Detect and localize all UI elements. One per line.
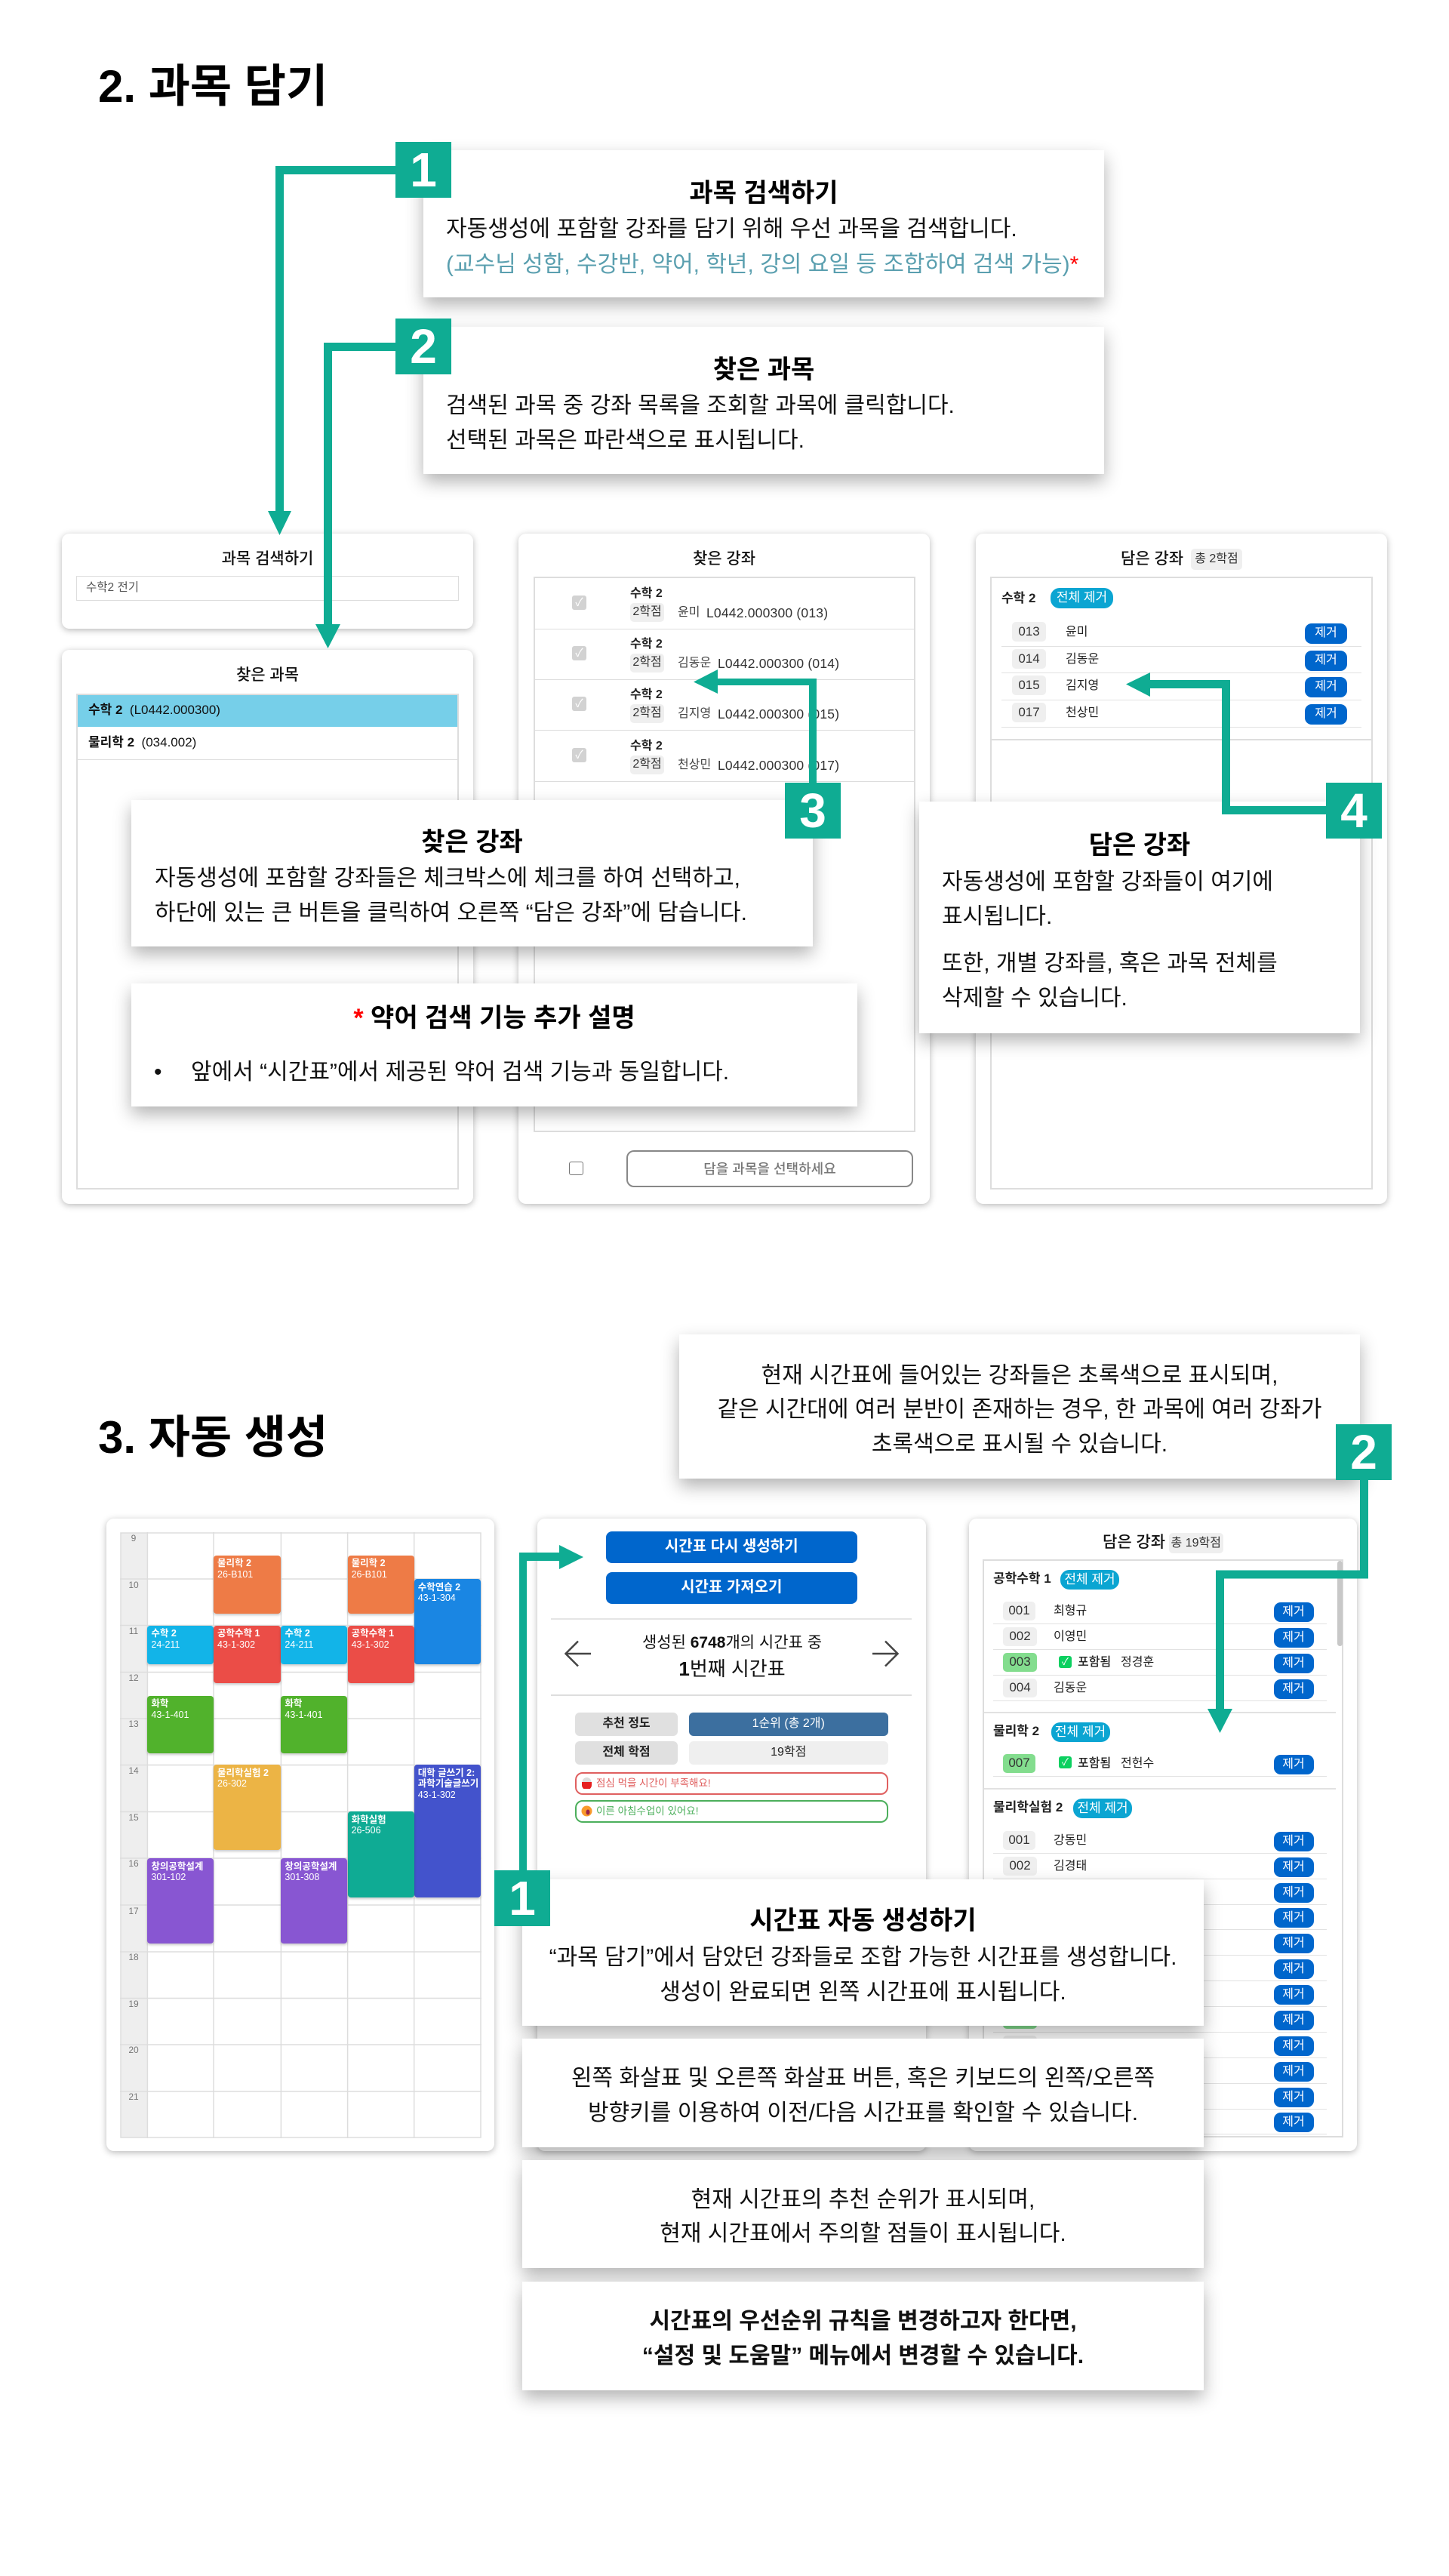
lecture row 014: 김동운 <box>678 657 711 669</box>
row 4: 제거 <box>1282 1911 1305 1924</box>
hour labels: 11 <box>129 1626 138 1636</box>
number badge 1: 1 <box>410 143 437 197</box>
course: 공학수학 1 <box>214 1626 281 1683</box>
group heading: 공학수학 1: 공학수학 1 <box>993 1571 1051 1586</box>
button: regenerate <box>605 1531 857 1563</box>
lecture row 014: L0442.000300 (014) <box>718 656 839 671</box>
row 002: 이영민 <box>1054 1630 1087 1643</box>
course: 수학연습 2: 수학연습 2 <box>418 1582 460 1593</box>
row 003 <box>993 1650 1327 1676</box>
callout line: 표시됩니다. <box>942 904 1052 929</box>
button: regenerate: 시간표 다시 생성하기 <box>665 1538 798 1555</box>
row 7 <box>993 1981 1327 2007</box>
course: 수학 2: 수학 2 <box>285 1628 310 1639</box>
callout line: 선택된 과목은 파란색으로 표시됩니다. <box>446 428 804 453</box>
select-all checkbox <box>569 1162 583 1175</box>
callout title: 찾은 강좌 <box>421 828 523 857</box>
course: 공학수학 1: 43-1-302 <box>217 1639 255 1650</box>
lecture row 014 <box>535 629 914 680</box>
remove all pill: 전체 제거 <box>1064 1572 1115 1587</box>
course: 물리학 2 <box>214 1556 281 1614</box>
credit chip: 총 2학점 <box>1195 552 1238 565</box>
row 9: 제거 <box>1282 2039 1305 2052</box>
number badge 1: 1 <box>509 1871 536 1925</box>
callout: 담은 강좌 설명 <box>919 802 1360 1033</box>
callout line: 방향키를 이용하여 이전/다음 시간표를 확인할 수 있습니다. <box>588 2101 1138 2125</box>
callout: 찾은 강좌 설명 <box>131 800 813 946</box>
value: credits: 19학점 <box>771 1746 806 1759</box>
callout line: 자동생성에 포함할 강좌를 담기 위해 우선 과목을 검색합니다. <box>446 217 1017 242</box>
course: 공학수학 1: 공학수학 1 <box>217 1628 260 1639</box>
callout line: “과목 담기”에서 담았던 강좌들로 조합 가능한 시간표를 생성합니다. <box>549 1945 1177 1970</box>
arrow: section 3 step 1 <box>519 1545 583 1870</box>
row 10 <box>993 2058 1327 2084</box>
row 013 <box>1001 620 1361 647</box>
callout: 화살표 안내 <box>522 2039 1204 2147</box>
search input <box>76 576 459 601</box>
row 001: 001 <box>1008 1603 1030 1617</box>
row 007: ✓ <box>1062 1756 1069 1768</box>
row 017 <box>1001 700 1361 728</box>
row 7: 제거 <box>1282 1988 1305 2001</box>
lecture row 017: 수학 2 <box>630 740 663 752</box>
remove all pill: 전체 제거 <box>1055 1725 1106 1739</box>
arrow: step 1 to search panel <box>268 166 395 535</box>
lecture list <box>534 577 915 1132</box>
hour labels: 18 <box>128 1952 139 1962</box>
course: 물리학 2 <box>348 1556 414 1614</box>
selected lecture list <box>990 577 1373 1190</box>
panel: 과목 검색하기 <box>62 534 473 629</box>
label: 추천 정도 <box>575 1713 678 1736</box>
panel title: 찾은 과목 <box>236 666 299 684</box>
remove all pill <box>1051 1722 1109 1742</box>
row 3 <box>993 1879 1327 1905</box>
callout line: 자동생성에 포함할 강좌들이 여기에 <box>942 869 1273 894</box>
row 001 <box>993 1828 1327 1854</box>
course: 공학수학 1: 43-1-302 <box>352 1639 389 1650</box>
course: 수학 2 <box>281 1626 347 1664</box>
course: 공학수학 1 <box>348 1626 414 1683</box>
icon: left arrow <box>565 1641 591 1667</box>
row 002: 002 <box>1009 1629 1031 1643</box>
number badge 1 <box>494 1870 550 1926</box>
row 014: 김동운 <box>1066 653 1099 666</box>
panel title: 찾은 강좌 <box>693 550 755 568</box>
number badge 3 <box>785 783 841 839</box>
hour labels: 15 <box>128 1811 139 1822</box>
value: rank <box>688 1713 888 1736</box>
callout line: 또한, 개별 강좌를, 혹은 과목 전체를 <box>942 951 1278 976</box>
hour labels <box>128 1532 139 2101</box>
arrow: step 3 <box>694 669 817 783</box>
heading: 3. 자동 생성: 3. 자동 생성 <box>98 1412 328 1463</box>
row 007: 제거 <box>1282 1758 1305 1771</box>
lecture list <box>983 1559 1343 2137</box>
row 015: 015 <box>1018 678 1040 692</box>
number badge 3: 3 <box>799 783 826 838</box>
lecture row 014: 2학점 <box>632 656 662 669</box>
course: 물리학실험 2: 물리학실험 2 <box>217 1768 269 1778</box>
button: import <box>605 1571 857 1603</box>
row 017: 017 <box>1018 705 1040 719</box>
lecture row 014: ✓ <box>575 647 583 660</box>
remove all pill: 전체 제거 <box>1057 590 1107 605</box>
lecture row 015: 2학점 <box>632 706 662 719</box>
icon: right arrow <box>872 1641 899 1667</box>
lecture row 015: 김지영 <box>678 707 711 720</box>
number badge 1 <box>395 142 451 198</box>
group heading: 수학 2 <box>1001 591 1035 605</box>
course: 화학 <box>281 1695 347 1753</box>
callout line: 현재 시간표의 추천 순위가 표시되며, <box>691 2187 1035 2212</box>
row 12 <box>993 2109 1327 2134</box>
course: 창의공학설계 <box>281 1858 347 1944</box>
course row <box>78 727 457 760</box>
row 001 <box>993 1599 1327 1624</box>
callout title: 담은 강좌 <box>1089 831 1190 860</box>
course: 화학실험: 26-506 <box>352 1825 381 1836</box>
row 001: 제거 <box>1282 1835 1305 1848</box>
hour labels: 12 <box>128 1673 139 1683</box>
arrow: step 2 to found courses <box>315 343 395 648</box>
row 014: 제거 <box>1315 654 1337 666</box>
callout text: 현재 시간표에 들어있는 강좌들은 초록색으로 표시되며, <box>761 1363 1278 1388</box>
callout line: 앞에서 “시간표”에서 제공된 약어 검색 기능과 동일합니다. <box>191 1060 729 1085</box>
row 017: 제거 <box>1315 707 1337 720</box>
course: 화학: 43-1-401 <box>285 1709 322 1719</box>
warning: early class: 이른 아침수업이 있어요! <box>596 1805 698 1817</box>
panel: 찾은 강좌 <box>518 534 930 1204</box>
course: 수학 2 <box>147 1626 214 1664</box>
hour labels: 21 <box>128 2091 139 2101</box>
value: credits <box>688 1741 888 1765</box>
row 001: 제거 <box>1282 1605 1305 1618</box>
callout line: 현재 시간표에서 주의할 점들이 표시됩니다. <box>660 2221 1066 2246</box>
row 001: 강동민 <box>1054 1834 1087 1847</box>
remove all pill: 전체 제거 <box>1077 1801 1128 1815</box>
course: 물리학 2: 26-B101 <box>352 1569 387 1580</box>
hour labels: 10 <box>128 1579 139 1590</box>
group heading: 물리학 2: 물리학 2 <box>993 1724 1039 1738</box>
hour labels: 17 <box>128 1905 139 1916</box>
row 10: 제거 <box>1282 2065 1305 2078</box>
hour labels: 20 <box>128 2044 139 2054</box>
row 8 <box>993 2007 1327 2033</box>
course: 수학연습 2 <box>414 1579 481 1664</box>
lecture row 013: 2학점 <box>632 605 662 618</box>
course: 화학실험: 화학실험 <box>352 1814 386 1825</box>
row 11 <box>993 2084 1327 2110</box>
row 004 <box>993 1676 1327 1701</box>
row 015: 김지영 <box>1066 679 1099 692</box>
panel title: 담은 강좌 <box>1103 1534 1165 1551</box>
callout line: 삭제할 수 있습니다. <box>942 986 1128 1011</box>
course: 물리학 2: 26-B101 <box>217 1569 253 1580</box>
generated count: 생성된 6748개의 시간표 중 <box>642 1634 822 1651</box>
callout title: 과목 검색하기 <box>689 179 838 208</box>
row 001: 최형규 <box>1054 1605 1087 1617</box>
callout: 시간표 자동 생성하기 <box>522 1879 1204 2026</box>
callout: 찾은 과목 <box>423 327 1104 474</box>
hour labels: 14 <box>128 1765 139 1775</box>
value: rank: 1순위 (총 2개) <box>752 1717 825 1730</box>
course: 창의공학설계: 창의공학설계 <box>151 1861 203 1872</box>
row 9 <box>993 2033 1327 2058</box>
row 002 <box>993 1854 1327 1879</box>
warning: lunch <box>575 1772 888 1795</box>
lecture row 013: 수학 2 <box>630 587 663 600</box>
scrollbar <box>1337 1561 1343 1646</box>
label: 추천 정도: 추천 정도 <box>602 1717 651 1730</box>
course list <box>76 694 459 1190</box>
warning: lunch: 점심 먹을 시간이 부족해요! <box>596 1777 711 1789</box>
callout line: 생성이 완료되면 왼쪽 시간표에 표시됩니다. <box>660 1980 1066 2005</box>
course: 대학 글쓰기: 대학 글쓰기 2: <box>418 1768 475 1778</box>
callout: 초록색 표시 설명 <box>679 1334 1360 1479</box>
lecture row 013: 윤미 <box>678 606 700 619</box>
course: 물리학실험 2 <box>214 1765 281 1850</box>
timetable grid <box>120 1532 481 2138</box>
panel: 찾은 과목 <box>62 650 473 1204</box>
course: 대학 글쓰기 <box>414 1765 481 1897</box>
row 8: 제거 <box>1282 2014 1305 2027</box>
group divider <box>984 1787 1336 1789</box>
row 004: 제거 <box>1282 1682 1305 1695</box>
callout: 과목 검색하기 <box>423 150 1104 297</box>
row 6: 제거 <box>1282 1962 1305 1975</box>
lecture row 017: 천상민 <box>678 759 711 771</box>
lecture row 013: L0442.000300 (013) <box>706 605 828 620</box>
remove all pill <box>1060 1570 1119 1590</box>
button: import: 시간표 가져오기 <box>681 1579 782 1596</box>
row 11: 제거 <box>1282 2091 1305 2104</box>
lecture row 015 <box>535 679 914 731</box>
row 002 <box>993 1624 1327 1650</box>
callout title: 시간표 자동 생성하기 <box>749 1907 977 1935</box>
callout line: 왼쪽 화살표 및 오른쪽 화살표 버튼, 혹은 키보드의 왼쪽/오른쪽 <box>571 2066 1155 2091</box>
course: 대학 글쓰기: 43-1-302 <box>418 1789 456 1799</box>
course: 수학 2: 수학 2 <box>151 1628 177 1639</box>
course: 화학: 화학 <box>285 1698 302 1709</box>
row 002: 002 <box>1009 1858 1031 1873</box>
course: 대학 글쓰기: 과학기술글쓰기 <box>418 1778 478 1789</box>
row 003: 포함됨 <box>1078 1656 1111 1669</box>
group divider <box>992 739 1371 740</box>
panel: 담은 강좌 (자동 생성) <box>969 1519 1357 2151</box>
selected course row: 수학 2 (L0442.000300) <box>88 703 220 717</box>
row 015 <box>1001 673 1361 700</box>
row 002: 제거 <box>1282 1631 1305 1644</box>
panel: timetable <box>106 1519 494 2151</box>
callout line: “설정 및 도움말” 메뉴에서 변경할 수 있습니다. <box>642 2344 1084 2368</box>
arrow: section 3 step 2 <box>1208 1480 1368 1733</box>
panel title: 담은 강좌 <box>1121 550 1183 568</box>
hour labels: 13 <box>128 1718 139 1728</box>
panel: generator controls <box>537 1519 926 2151</box>
row 003: 제거 <box>1282 1657 1305 1670</box>
panel: 담은 강좌 <box>976 534 1387 1204</box>
lecture row 014: 수학 2 <box>630 638 663 651</box>
course: 화학: 화학 <box>151 1698 168 1709</box>
credit chip <box>1191 549 1242 570</box>
current timetable index: 1번째 시간표 <box>678 1657 786 1680</box>
course: 수학연습 2: 43-1-304 <box>418 1593 456 1603</box>
lecture row 015: ✓ <box>575 697 583 710</box>
arrow: step 4 <box>1126 672 1326 814</box>
lecture row 013: ✓ <box>575 596 583 609</box>
callout text: 초록색으로 표시될 수 있습니다. <box>872 1432 1168 1457</box>
divider <box>551 1694 912 1695</box>
row 007 <box>993 1751 1327 1777</box>
course: 공학수학 1: 공학수학 1 <box>352 1628 394 1639</box>
course: 창의공학설계: 301-308 <box>285 1872 319 1882</box>
row 017: 천상민 <box>1066 706 1099 719</box>
course: 창의공학설계: 창의공학설계 <box>285 1861 337 1872</box>
label: 전체 학점 <box>575 1741 678 1765</box>
group heading: 물리학실험 2: 물리학실험 2 <box>993 1800 1063 1814</box>
course: 물리학 2: 물리학 2 <box>352 1558 386 1568</box>
callout line: 검색된 과목 중 강좌 목록을 조회할 과목에 클릭합니다. <box>446 393 955 418</box>
row 014 <box>1001 647 1361 673</box>
add button: 담을 과목을 선택하세요 <box>703 1162 836 1177</box>
row 007: 007 <box>1008 1756 1030 1770</box>
callout: 약어 검색 <box>131 983 857 1106</box>
row 003: 003 <box>1009 1654 1031 1669</box>
remove all pill <box>1073 1799 1132 1818</box>
lecture row 017: ✓ <box>575 749 583 762</box>
divider <box>551 1618 912 1620</box>
course: 화학 <box>147 1695 214 1753</box>
callout: 추천 순위 안내 <box>522 2160 1204 2268</box>
row 013: 013 <box>1018 624 1040 639</box>
callout: 우선순위 규칙 안내 <box>522 2282 1204 2390</box>
search input: 수학2 전기 <box>86 581 139 594</box>
row 013: 윤미 <box>1066 626 1088 639</box>
row 004: 김동운 <box>1054 1682 1087 1694</box>
course: 수학 2: 24-211 <box>285 1639 313 1650</box>
hour labels: 19 <box>128 1999 139 2009</box>
callout text: 같은 시간대에 여러 분반이 존재하는 경우, 한 과목에 여러 강좌가 <box>718 1397 1321 1422</box>
callout line: 시간표의 우선순위 규칙을 변경하고자 한다면, <box>649 2309 1077 2334</box>
row 001: 001 <box>1008 1833 1030 1847</box>
lecture row 017 <box>535 731 914 782</box>
lecture row 015: 수학 2 <box>630 688 663 701</box>
course: 물리학 2: 물리학 2 <box>217 1558 251 1568</box>
row 013: 제거 <box>1315 626 1337 639</box>
row 3: 제거 <box>1282 1886 1305 1899</box>
callout title: * 약어 검색 기능 추가 설명 <box>353 1004 635 1033</box>
callout line: 하단에 있는 큰 버튼을 클릭하여 오른쪽 “담은 강좌”에 담습니다. <box>155 900 747 925</box>
add button <box>626 1150 913 1187</box>
remove all pill <box>1051 588 1113 608</box>
group divider <box>984 1712 1336 1713</box>
course row: 물리학 2 (034.002) <box>88 735 196 749</box>
row 014: 014 <box>1018 651 1040 666</box>
selected course row <box>78 695 457 727</box>
credit chip <box>1168 1532 1223 1553</box>
course: 창의공학설계 <box>147 1858 214 1944</box>
callout line: 자동생성에 포함할 강좌들은 체크박스에 체크를 하여 선택하고, <box>155 866 740 891</box>
row 003: ✓ <box>1062 1656 1069 1667</box>
lecture row 017: 2학점 <box>632 758 662 771</box>
callout note: (교수님 성함, 수강반, 약어, 학년, 강의 요일 등 조합하여 검색 가능)* <box>446 252 1078 277</box>
row 007: 포함됨 <box>1078 1757 1111 1770</box>
callout title: 찾은 과목 <box>713 355 814 384</box>
heading: 2. 과목 담기: 2. 과목 담기 <box>98 61 328 112</box>
credit chip: 총 19학점 <box>1171 1537 1221 1549</box>
row 002: 김경태 <box>1054 1860 1087 1873</box>
number badge 4: 4 <box>1340 783 1367 838</box>
course: 창의공학설계: 301-102 <box>151 1872 186 1882</box>
panel title: 과목 검색하기 <box>222 550 313 568</box>
hour labels: 16 <box>128 1858 139 1869</box>
lecture row 015: L0442.000300 (015) <box>718 706 839 722</box>
row 003: 정경훈 <box>1121 1656 1154 1669</box>
label: 전체 학점: 전체 학점 <box>602 1746 651 1759</box>
row 002: 제거 <box>1282 1860 1305 1873</box>
number badge 2 <box>1336 1424 1392 1480</box>
row 004: 004 <box>1009 1680 1031 1694</box>
row 6 <box>993 1956 1327 1981</box>
row 5 <box>993 1930 1327 1956</box>
course: 화학실험 <box>348 1811 414 1897</box>
number badge 2: 2 <box>1350 1425 1377 1479</box>
row 12: 제거 <box>1282 2116 1305 2128</box>
course: 화학: 43-1-401 <box>151 1709 189 1719</box>
hour labels: 9 <box>131 1532 136 1543</box>
course: 수학 2: 24-211 <box>151 1639 180 1650</box>
lecture row 013 <box>535 578 914 629</box>
lecture row 017: L0442.000300 (017) <box>718 758 839 773</box>
row 4 <box>993 1904 1327 1930</box>
row 5: 제거 <box>1282 1937 1305 1950</box>
row 015: 제거 <box>1315 680 1337 693</box>
number badge 2: 2 <box>410 319 437 374</box>
bullet: • <box>154 1060 162 1085</box>
number badge 4 <box>1326 783 1382 839</box>
warning: early class <box>575 1800 888 1823</box>
course: 물리학실험 2: 26-302 <box>217 1778 247 1789</box>
row 007: 전헌수 <box>1121 1757 1154 1770</box>
number badge 2 <box>395 319 451 374</box>
